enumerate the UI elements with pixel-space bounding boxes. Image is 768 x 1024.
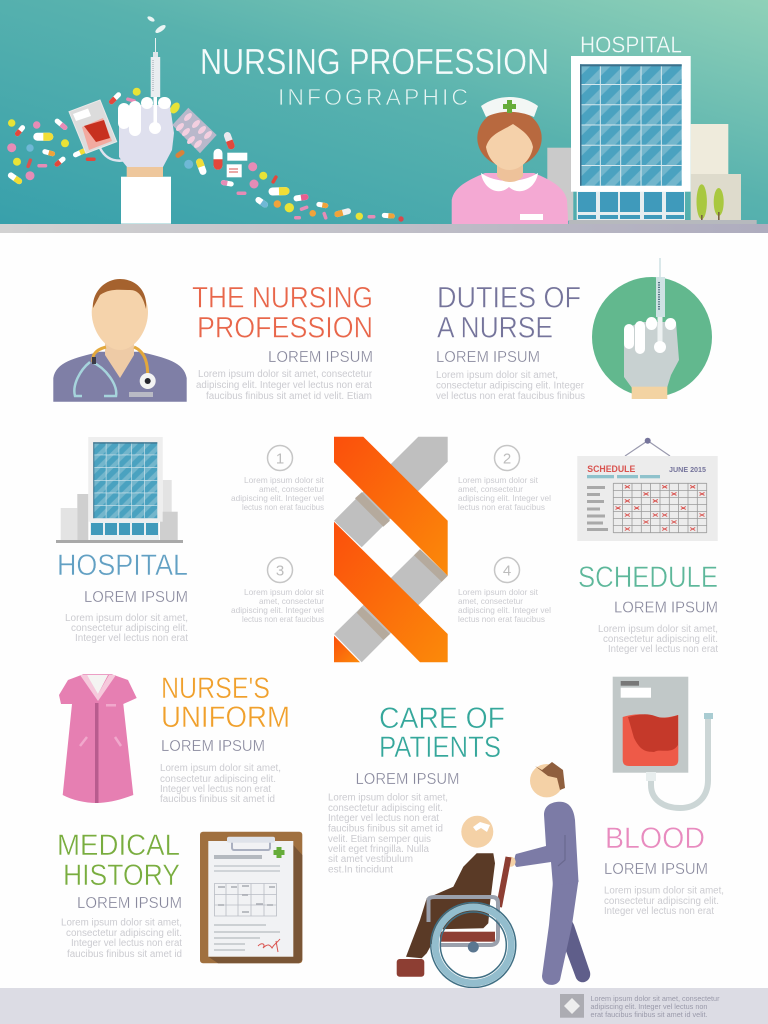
point 4: adipiscing elit. Integer vel [458,605,551,615]
carer [506,762,590,985]
subheading: LOREM IPSUM [356,771,460,788]
icon: hospital building [56,437,183,543]
heading: HISTORY [63,859,180,892]
heading: THE NURSING [192,282,373,314]
footer text [590,994,720,1019]
icon: nurse [452,97,568,224]
icon: gloved hand with syringe [118,15,174,224]
text block: sit amet vestibulum [328,854,413,865]
point 2: adipiscing elit. Integer vel [458,493,551,503]
heading: CARE OF [379,702,505,735]
icon: hospital building in banner [547,32,757,224]
icon: footer logo [560,994,584,1018]
text block [160,763,281,805]
icon: wall calendar [577,438,718,541]
text block: Integer vel lectus non erat [71,938,182,949]
chart: orange and grey twisted ribbon [334,437,448,662]
title: NURSING PROFESSION [200,41,549,82]
text block: velit eget fringilla. Nulla [328,844,429,855]
icon: blood bag with tube [613,677,713,808]
wheelchair frame and wheel [428,897,516,988]
point 2: lectus non erat faucibus [458,502,545,512]
heading: BLOOD [605,822,705,855]
panel: footer [0,988,768,1024]
text block: faucibus finibus sit amet id velit. Etiam [206,391,372,402]
point 2: amet, consectetur [458,484,523,494]
point 2: 2 [503,450,511,468]
text block: Integer vel lectus non erat [604,906,714,917]
text block: velit. Etiam semper quis [328,834,431,845]
heading [437,282,581,344]
text block [436,370,585,402]
subheading: LOREM IPSUM [614,600,718,616]
text block [604,886,724,917]
subheading: LOREM IPSUM [268,349,373,366]
panel: duties of a nurse [436,258,712,402]
panel: blood [604,677,724,917]
heading: SCHEDULE [578,561,718,594]
text block [196,369,373,402]
text block [328,792,448,876]
heading: PROFESSION [197,312,373,344]
panel: hospital [56,437,188,644]
text block: adipiscing elit. Integer vel lectus non erat [196,380,372,391]
panel: the nursing profession [53,279,373,402]
text block: Integer vel lectus non erat [328,813,439,824]
point 4: lectus non erat faucibus [458,614,545,624]
point 1: lectus non erat faucibus [242,502,324,512]
heading: PATIENTS [379,731,501,764]
title: INFOGRAPHIC [278,84,468,110]
icon: hand with syringe in green circle [592,258,712,399]
patient [397,816,495,977]
heading [57,829,180,892]
point 1 [231,446,325,512]
icon: pink dress [59,674,137,803]
text block: faucibus finibus sit amet id [328,824,443,834]
heading: A NURSE [437,312,553,344]
title [200,41,549,110]
text block: vel lectus non erat faucibus finibus [436,391,585,402]
pills stream right [168,101,404,222]
pills stream left [7,88,141,185]
footer text: Lorem ipsum dolor sit amet, consectetur [590,994,720,1003]
subheading: LOREM IPSUM [161,738,265,755]
text block: consectetur adipiscing elit. [66,928,182,939]
icon: hospital building in banner: HOSPITAL [580,32,682,58]
text block: Lorem ipsum dolor sit amet, [598,624,718,635]
text block: Lorem ipsum dolor sit amet, [160,763,281,774]
heading: NURSE'S [161,672,270,705]
heading: MEDICAL [57,829,180,862]
footer text: adipiscing elit. Integer vel lectus non [590,1002,708,1011]
heading: DUTIES OF [437,282,581,314]
sleeve [121,177,171,224]
heading [379,702,505,764]
text block: consectetur adipiscing elit. [160,774,276,785]
text block: consectetur adipiscing elit. [71,623,188,634]
panel: schedule [577,438,718,655]
panel: care of patients [328,702,590,988]
syringe [147,15,167,134]
icon: clipboard with chart [200,832,302,963]
text block: faucibus finibus sit amet id [160,794,275,805]
panel: header banner [0,0,768,233]
text block: Lorem ipsum dolor sit amet, [436,370,558,381]
point 2 [458,446,551,512]
text block: consectetur adipiscing elit. [328,803,443,814]
text block: consectetur adipiscing elit. [604,896,719,907]
text block: consectetur adipiscing elit. Integer [436,380,585,392]
text block: Lorem ipsum dolor sit amet, consectetur [198,369,373,380]
subheading: LOREM IPSUM [436,349,540,366]
text block: Lorem ipsum dolor sit amet, [65,613,188,624]
text block: Integer vel lectus non erat [75,633,188,644]
panel: nurse's uniform [59,672,290,805]
point 1: amet, consectetur [259,484,324,494]
subheading: LOREM IPSUM [84,589,188,606]
text block: Lorem ipsum dolor sit amet, [61,918,182,928]
heading: HOSPITAL [57,549,188,582]
point 4: Lorem ipsum dolor sit [458,587,539,597]
icon: wall calendar: SCHEDULE [587,464,635,475]
heading [161,672,290,734]
point 1: adipiscing elit. Integer vel [231,493,324,503]
text block [65,613,188,644]
point 3 [231,558,325,624]
wheelchair handle and seat [440,857,508,942]
point 4 [458,558,551,624]
text block: Lorem ipsum dolor sit amet, [604,886,724,896]
point 1: Lorem ipsum dolor sit [244,475,325,485]
icon: carer pushing patient in wheelchair [397,762,590,988]
text block: est.In tincidunt [328,864,393,876]
icon: blister pack [172,108,217,153]
heading: UNIFORM [161,701,290,734]
subheading: LOREM IPSUM [604,861,708,878]
heading [192,282,373,344]
point 4: 4 [503,562,511,580]
panel: numbered points with ribbon [231,437,551,662]
point 3: Lorem ipsum dolor sit [244,587,325,597]
text block [598,624,718,655]
point 3: amet, consectetur [259,596,324,606]
text block: Integer vel lectus non erat [608,644,718,655]
text block [61,918,182,960]
footer text: erat faucibus finibus sit amet id velit. [590,1010,708,1019]
text block: Integer vel lectus non erat [160,784,271,795]
point 1: 1 [276,450,284,468]
icon: blood bag tilted [69,100,126,161]
panel: medical history [57,829,302,963]
icon: wall calendar: JUNE 2015 [669,465,706,474]
icon: male nurse with stethoscope [53,279,187,402]
subheading: LOREM IPSUM [77,895,182,912]
text block: Lorem ipsum dolor sit amet, [328,792,448,804]
text block: consectetur adipiscing elit. [603,634,718,645]
point 4: amet, consectetur [458,596,523,606]
point 2: Lorem ipsum dolor sit [458,475,539,485]
point 3: adipiscing elit. Integer vel [231,605,324,615]
text block: faucibus finibus sit amet id [67,949,182,960]
point 3: 3 [276,562,284,580]
point 3: lectus non erat faucibus [242,614,324,624]
